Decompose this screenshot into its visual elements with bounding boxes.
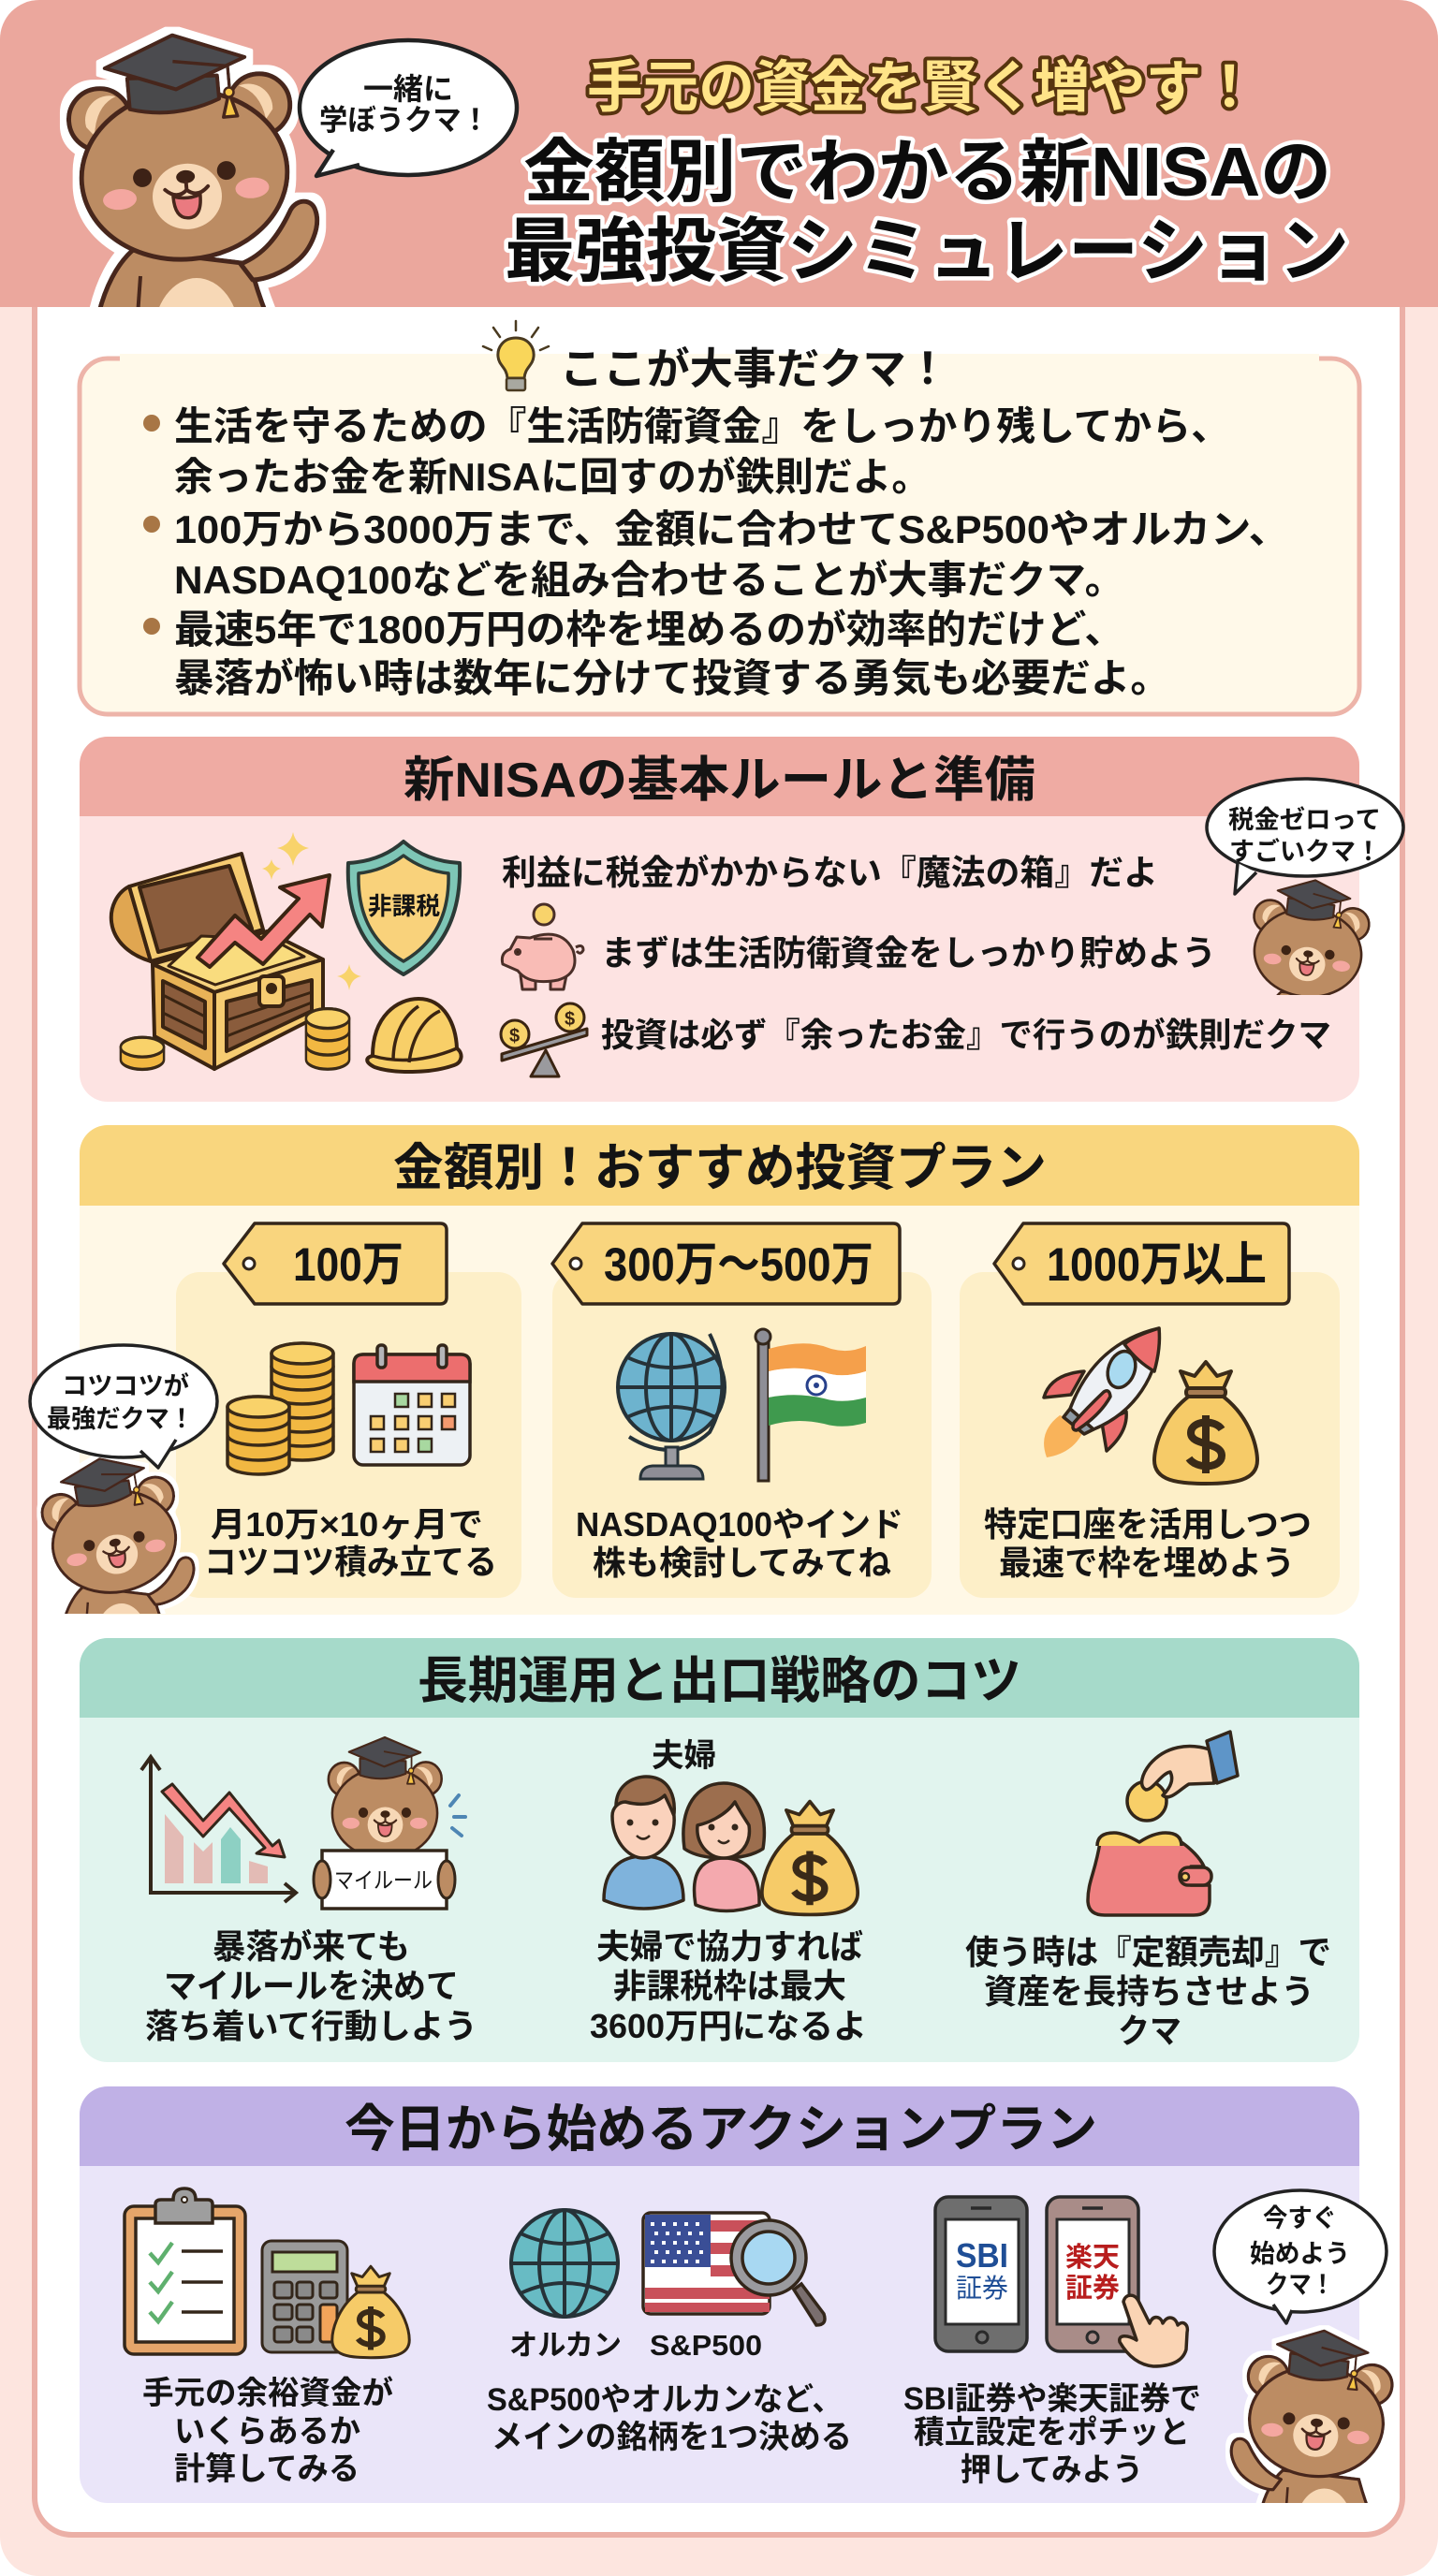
caption: pick main fund	[487, 2382, 852, 2455]
speech bubble: action plan: 始めよう	[1250, 2240, 1350, 2268]
text: magic box: 利益に税金がかからない『魔法の箱』だよ	[502, 854, 1158, 892]
icon: coin stacks	[227, 1343, 333, 1474]
speech bubble: action plan	[1214, 2190, 1387, 2323]
speech bubble: basic rules: 税金ゼロって	[1228, 805, 1381, 834]
key point 2: 100万から3000万まで、金額に合わせてS&P500やオルカン、	[174, 507, 1289, 551]
caption: 10 million yen or more: 最速で枠を埋めよう	[999, 1544, 1295, 1582]
card: 10 million yen or more	[960, 1223, 1340, 1598]
caption: fixed-amount withdrawal: クマ	[1118, 2012, 1181, 2050]
title line 2: 最強投資シミュレーション	[505, 212, 1349, 290]
speech bubble: action plan: クマ！	[1266, 2271, 1334, 2299]
icon: balance scale: $	[565, 1009, 575, 1030]
icon: balance scale	[501, 1003, 587, 1076]
speech bubble: plans: 最強だクマ！	[47, 1405, 194, 1433]
caption: check funds: 手元の余裕資金が	[142, 2375, 393, 2411]
label: all country: オルカン	[509, 2329, 622, 2362]
key point 2: NASDAQ100などを組み合わせることが大事だクマ。	[174, 558, 1124, 602]
icon: money bag	[1154, 1362, 1257, 1484]
icon: tapping hand	[1120, 2295, 1187, 2366]
bear mascot: plans	[37, 1456, 198, 1614]
caption: check funds	[142, 2375, 393, 2487]
icon: hard hat	[367, 999, 462, 1072]
icon: wallet with coin and hand	[1088, 1732, 1238, 1915]
speech bubble: action plan: 今すぐ	[1263, 2204, 1337, 2232]
icon: world globe	[511, 2210, 618, 2317]
caption: couple	[590, 1927, 867, 2045]
label: couple: 夫婦	[652, 1738, 716, 1774]
icon: magnifying glass	[731, 2220, 825, 2325]
bear with my-rule sign: マイルール	[334, 1868, 433, 1894]
icon: calculator	[262, 2241, 347, 2352]
icon: tax-free shield: 非課税	[368, 892, 440, 920]
bear mascot: action plan	[1225, 2325, 1394, 2503]
caption: set up recurring: SBI証券や楽天証券で	[903, 2381, 1201, 2417]
tag: 300万〜500万: 300万〜500万	[604, 1238, 873, 1291]
label: S&P500: S&P500	[650, 2329, 762, 2362]
bear mascot: header	[60, 26, 326, 307]
key point 2	[143, 507, 1289, 602]
icon: piggy bank	[502, 904, 583, 989]
subtitle: 手元の資金を賢く増やす！	[587, 56, 1257, 119]
caption: check funds: いくらあるか	[174, 2414, 360, 2450]
caption: couple: 非課税枠は最大	[613, 1967, 846, 2005]
key point 1: 余ったお金を新NISAに回すのが鉄則だよ。	[174, 455, 931, 499]
bear with my-rule sign	[314, 1737, 465, 1909]
speech bubble: basic rules: すごいクマ！	[1229, 837, 1381, 866]
text: emergency fund: まずは生活防衛資金をしっかり貯めよう	[601, 934, 1216, 973]
heading: key points: ここが大事だクマ！	[560, 344, 949, 393]
speech bubble: basic rules	[1207, 779, 1403, 894]
speech bubble: plans	[30, 1345, 217, 1468]
caption: pick main fund: S&P500やオルカンなど、	[487, 2382, 843, 2418]
key point 1: 生活を守るための『生活防衛資金』をしっかり残してから、	[174, 404, 1230, 448]
key point 3	[143, 607, 1170, 700]
caption: 1 million yen	[204, 1505, 497, 1581]
caption: 3 to 5 million yen	[576, 1505, 903, 1582]
key point 3: 最速5年で1800万円の枠を埋めるのが効率的だけど、	[174, 607, 1124, 651]
caption: my rule	[145, 1927, 477, 2045]
icon: globe	[618, 1334, 725, 1479]
caption: fixed-amount withdrawal: 使う時は『定額売却』で	[965, 1933, 1331, 1971]
chart: falling market	[141, 1757, 296, 1902]
speech bubble: header	[300, 40, 517, 176]
icon: tax-free shield	[348, 842, 460, 974]
icon: balance scale: $	[509, 1026, 520, 1046]
caption: 1 million yen: 月10万×10ヶ月で	[211, 1505, 483, 1544]
caption: set up recurring: 積立設定をポチッと	[914, 2415, 1190, 2451]
speech bubble: header: 一緒に	[363, 72, 453, 106]
icon: couple	[604, 1777, 764, 1911]
panel: action plan	[80, 2086, 1394, 2503]
tag: 300万〜500万	[552, 1223, 900, 1304]
icon: Rakuten phone	[1047, 2197, 1138, 2351]
heading: plans: 金額別！おすすめ投資プラン	[393, 1140, 1047, 1196]
heading: basic rules: 新NISAの基本ルールと準備	[404, 754, 1035, 808]
title line 1: 金額別でわかる新NISAの	[523, 133, 1331, 211]
key point 3: 暴落が怖い時は数年に分けて投資する勇気も必要だよ。	[174, 656, 1170, 700]
icon: US flag	[643, 2213, 770, 2314]
caption: 1 million yen: コツコツ積み立てる	[204, 1543, 497, 1581]
icon: SBI phone: 証券	[956, 2274, 1008, 2303]
tag: 100万	[224, 1223, 447, 1304]
tag: 100万: 100万	[293, 1238, 404, 1291]
icon: rocket	[1044, 1328, 1159, 1457]
speech bubble: header: 学ぼうクマ！	[319, 104, 490, 137]
tag: 1000万以上: 1000万以上	[1047, 1238, 1267, 1291]
icon: SBI phone	[935, 2197, 1027, 2351]
card: 1 million yen	[176, 1223, 521, 1598]
icon: clipboard	[125, 2188, 245, 2354]
caption: 10 million yen or more	[984, 1505, 1312, 1582]
heading: long-term: 長期運用と出口戦略のコツ	[418, 1653, 1021, 1709]
icon: treasure chest	[111, 854, 349, 1069]
caption: 3 to 5 million yen: NASDAQ100やインド	[576, 1505, 903, 1544]
tag: 1000万以上	[994, 1223, 1289, 1304]
heading: action plan: 今日から始めるアクションプラン	[345, 2101, 1097, 2158]
header band	[0, 0, 1438, 307]
caption: couple: 3600万円になるよ	[590, 2007, 867, 2045]
panel: key points	[80, 321, 1359, 714]
caption: my rule: 落ち着いて行動しよう	[145, 2007, 477, 2045]
panel: basic rules	[80, 737, 1403, 1102]
bear mascot: basic rules	[1253, 879, 1371, 995]
caption: set up recurring	[903, 2381, 1201, 2488]
icon: money bag couple	[762, 1802, 858, 1914]
caption: pick main fund: メインの銘柄を1つ決める	[492, 2420, 852, 2455]
icon: money bag calculator	[332, 2266, 409, 2358]
panel: plans by amount	[28, 1125, 1359, 1615]
icon: calendar	[354, 1345, 470, 1465]
caption: my rule: 暴落が来ても	[213, 1927, 410, 1966]
key point 1	[143, 404, 1230, 499]
panel: long-term and exit strategy	[80, 1638, 1359, 2062]
card: 3 to 5 million yen	[552, 1223, 932, 1598]
icon: India flag	[756, 1329, 866, 1481]
icon: Rakuten phone: 楽天	[1065, 2242, 1120, 2273]
caption: fixed-amount withdrawal: 資産を長持ちさせよう	[984, 1972, 1314, 2011]
caption: check funds: 計算してみる	[174, 2452, 360, 2487]
text: spare money: 投資は必ず『余ったお金』で行うのが鉄則だクマ	[601, 1016, 1331, 1054]
caption: set up recurring: 押してみよう	[961, 2452, 1143, 2488]
icon: Rakuten phone: 証券	[1065, 2273, 1120, 2304]
caption: 3 to 5 million yen: 株も検討してみてね	[593, 1544, 891, 1582]
icon: SBI phone: SBI	[956, 2236, 1008, 2275]
caption: couple: 夫婦で協力すれば	[596, 1927, 863, 1966]
caption: 10 million yen or more: 特定口座を活用しつつ	[984, 1505, 1312, 1544]
speech bubble: plans: コツコツが	[62, 1371, 189, 1400]
icon: sparkles	[262, 832, 361, 990]
caption: my rule: マイルールを決めて	[164, 1967, 459, 2005]
caption: fixed-amount withdrawal	[965, 1933, 1331, 2050]
icon: light bulb	[483, 321, 549, 390]
